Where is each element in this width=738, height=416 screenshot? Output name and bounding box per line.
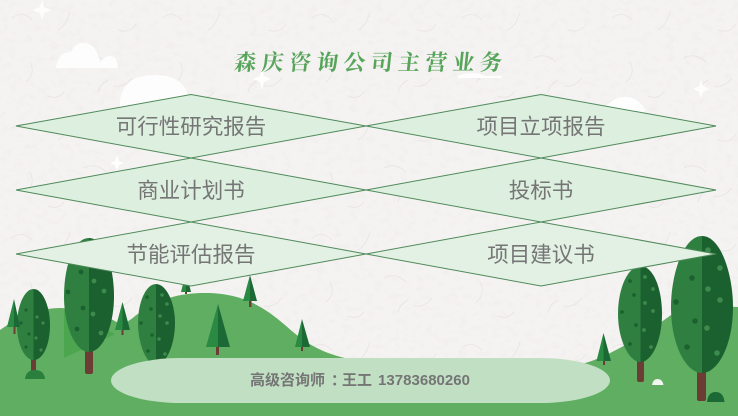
diamond: 节能评估报告: 节能评估报告 [126,243,256,267]
tree: right large [671,236,733,401]
clouds and sparkles [33,0,709,171]
contact pill: ： [331,372,346,389]
contact pill: 王工 [342,372,372,389]
pine trees left [7,272,310,355]
diamond: 商业计划书 [16,158,366,222]
diamond: 项目建议书: 项目建议书 [487,243,595,267]
diamond: 商业计划书: 商业计划书 [137,179,245,203]
diamond: 项目建议书 [366,222,716,286]
tree: small left [17,289,50,379]
contact pill: 13783680260 [378,372,470,389]
diamond: 投标书: 投标书 [509,179,573,203]
hills [0,293,738,416]
diamond: 可行性研究报告 [16,94,366,158]
contact pill [111,358,610,403]
title: 森庆咨询公司主营业务 [233,46,509,77]
diamond: 可行性研究报告: 可行性研究报告 [116,115,266,139]
tree: large left [64,238,114,374]
pine tree right [596,333,611,365]
diamond: 节能评估报告 [16,222,366,286]
diamond: 项目立项报告: 项目立项报告 [476,115,606,139]
contact pill: 高级咨询师 [250,371,325,389]
tree: right middle [618,266,662,382]
tree: middle left [138,284,175,365]
diamond: 投标书 [366,158,716,222]
diamond: 项目立项报告 [366,94,716,158]
bush and stone right [652,379,724,402]
